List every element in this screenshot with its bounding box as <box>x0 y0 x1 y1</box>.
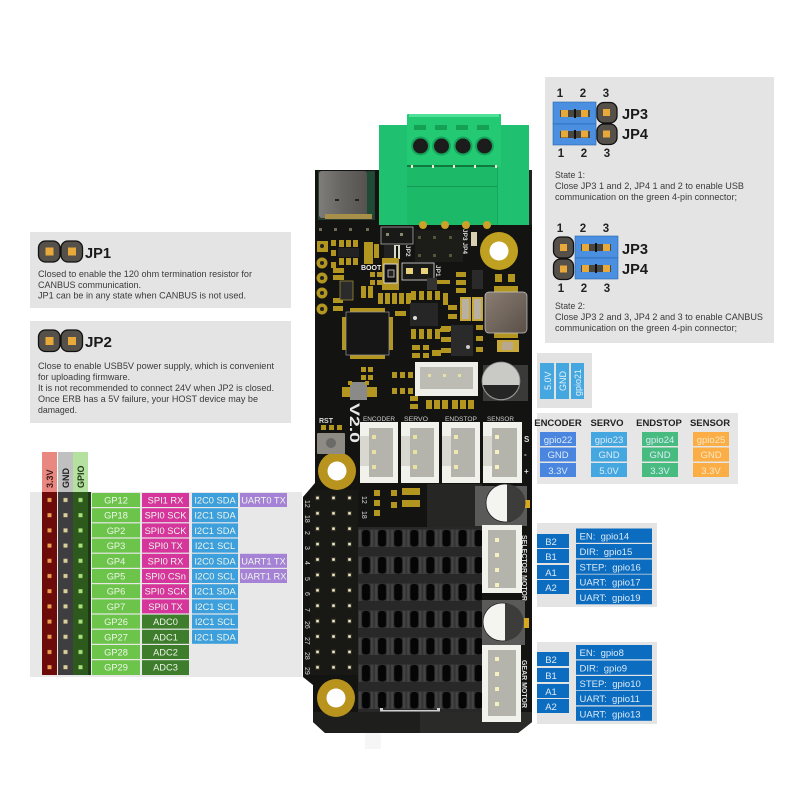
row: GP26: GP26 <box>104 617 128 627</box>
column: ENDSTOP: 3.3V <box>650 466 670 477</box>
panel: JP1 description <box>30 232 291 308</box>
board outline <box>303 170 532 733</box>
column: SENSOR: 3.3V <box>701 466 721 477</box>
connector: SERVO: SERVO <box>404 416 428 423</box>
row: GP27: I2C1 SDA <box>194 632 236 642</box>
text: JP2 description: It is not recommended to connect 24V when JP2 is closed. <box>38 383 274 393</box>
pin header labels: 29 <box>303 667 310 675</box>
header: 3.3V column <box>42 452 57 492</box>
labels: state 2 JP3 JP4: JP4 <box>622 261 649 278</box>
pin header labels <box>303 496 367 675</box>
diagram: state 2 jumpers: 2 <box>581 283 587 295</box>
driver signal labels <box>576 528 652 604</box>
row: GP27: ADC1 <box>153 632 178 642</box>
row: GP6: GP6 <box>107 587 125 597</box>
connector: SENSOR: SENSOR <box>487 416 514 423</box>
labels: state 2 JP3 JP4: JP3 <box>622 241 648 258</box>
column: SERVO <box>590 418 627 477</box>
inductor <box>485 292 527 333</box>
polarity labels: + <box>524 467 529 476</box>
row: GP18: GP18 <box>104 511 128 521</box>
header: GPIO column: GPIO <box>76 465 86 488</box>
column: SENSOR: GND <box>700 450 722 461</box>
panel: connector pinouts <box>534 413 738 484</box>
diagram: state 1 jumpers <box>553 88 617 160</box>
text: state 1: Close JP3 1 and 2, JP4 1 and 2 to enable USB <box>555 181 744 191</box>
labels: state 2 JP3 JP4 <box>622 241 649 278</box>
row: GP26: ADC0 <box>153 617 178 627</box>
column: SENSOR: SENSOR <box>690 418 730 429</box>
pin header labels: 27 <box>303 637 310 645</box>
polarity labels: S <box>524 435 530 444</box>
row: GP12: SPI1 RX <box>148 496 183 506</box>
driver signal labels: UART: gpio11 <box>580 694 640 705</box>
text: state 1: State 1: <box>555 170 585 180</box>
pin header labels: 12 <box>303 500 310 508</box>
capacitor 2 <box>475 484 530 526</box>
polarity labels <box>524 435 530 476</box>
text: JP1 description: CANBUS communication. <box>38 280 141 290</box>
row: GP4: I2C0 SDA <box>194 556 236 566</box>
column: SERVO: SERVO <box>590 418 624 429</box>
row: GP7 <box>92 599 238 613</box>
row: GP7: GP7 <box>107 602 125 612</box>
connector: SERVO <box>401 416 439 483</box>
motor coil labels: B2 <box>545 655 557 666</box>
motor coil labels: A2 <box>545 583 557 594</box>
labels: JP3 JP4 silkscreen: JP3 JP4 <box>461 229 468 254</box>
motor coil labels: B1 <box>545 671 557 682</box>
row: GP5 <box>92 569 287 583</box>
text: JP2 description: damaged. <box>38 405 77 415</box>
diagram: state 1 jumpers: 2 <box>581 148 587 160</box>
pin header labels: 3 <box>303 546 310 550</box>
row: GP6: SPI0 SCK <box>145 587 187 597</box>
column: ENCODER: GND <box>547 450 569 461</box>
pin strips <box>42 492 91 675</box>
castellated edge pads <box>316 241 328 314</box>
pin header labels: 12 <box>360 496 367 504</box>
row: GP12: GP12 <box>104 496 128 506</box>
motor coil labels: A2 <box>545 702 557 713</box>
row: GP29: GP29 <box>104 663 128 673</box>
reset button: RST <box>319 418 334 425</box>
row: GP12: I2C0 SDA <box>194 496 236 506</box>
label: BOOT: BOOT <box>361 265 382 272</box>
connector: ENCODER: ENCODER <box>363 416 395 423</box>
row: GP2 <box>92 523 238 537</box>
driver signal labels: UART: gpio19 <box>580 593 641 604</box>
row: GP3: I2C1 SCL <box>195 541 235 551</box>
row: GP3: SPI0 TX <box>148 541 183 551</box>
driver signal labels: EN: gpio14 <box>580 532 629 542</box>
panel: selector motor pins <box>537 523 657 607</box>
main processor <box>342 308 393 359</box>
row: GP12: UART0 TX <box>241 496 286 506</box>
text: state 2: Close JP3 2 and 3, JP4 2 and 3 to enable CANBUS <box>555 312 763 322</box>
label: JP2 silkscreen: JP2 <box>404 245 411 257</box>
header: 3.3V column: 3.3V <box>45 469 55 488</box>
column: ENCODER: gpio22 <box>544 435 572 446</box>
column: SERVO: GND <box>598 450 620 461</box>
row: GP2: I2C1 SDA <box>194 526 236 536</box>
driver signal labels: STEP: gpio16 <box>580 562 641 574</box>
driver signal labels: DIR: gpio15 <box>580 547 632 558</box>
pin header labels: 18 <box>360 511 367 519</box>
gold power blocks <box>460 286 519 352</box>
label: GEAR MOTOR: GEAR MOTOR <box>520 660 527 708</box>
column: SERVO: gpio23 <box>595 435 623 446</box>
driver signal labels: UART: gpio13 <box>580 710 641 720</box>
text: JP2 description: Close to enable USB5V power supply, which is convenient <box>38 361 275 371</box>
pad dots under USB <box>319 228 369 231</box>
JP2 header <box>381 227 413 259</box>
column: ENDSTOP: GND <box>649 450 671 461</box>
motor coil labels: B2 <box>545 537 557 548</box>
silkscreen: V2.0: V2.0 <box>347 403 363 443</box>
header: GND column: GND <box>61 468 71 488</box>
text: state 1: communication on the green 4-pin connector; <box>555 192 737 202</box>
green 4-pin connector <box>379 114 532 225</box>
label: JP1 silkscreen: JP1 <box>434 265 441 277</box>
row: GP5: SPI0 CSn <box>145 572 186 582</box>
row: GP26: I2C1 SCL <box>195 617 235 627</box>
connector: ENCODER <box>360 416 398 483</box>
panel: 5V GND gpio21: GND <box>558 370 568 391</box>
row: GP3 <box>92 539 238 553</box>
column: SERVO: 5.0V <box>599 466 619 477</box>
panel: GPIO pin table <box>30 452 302 677</box>
labels: state 1 JP3 JP4 <box>622 106 649 143</box>
row: GP5: GP5 <box>107 572 125 582</box>
pin header labels: 4 <box>303 561 310 565</box>
driver signal labels <box>576 645 652 721</box>
row: GP4 <box>92 554 287 568</box>
row: GP7: SPI0 TX <box>148 602 183 612</box>
panel: 5V GND gpio21 <box>537 353 592 408</box>
row: GP27 <box>92 630 238 644</box>
text: state 2: State 2: <box>555 301 585 311</box>
row: GP6: I2C1 SDA <box>194 587 236 597</box>
motor coil labels <box>537 652 569 713</box>
small chips <box>338 248 483 356</box>
row: GP3: GP3 <box>107 541 125 551</box>
top capacitor <box>482 362 528 401</box>
column: ENDSTOP <box>636 418 683 477</box>
diagram: state 1 jumpers: 2 <box>580 88 586 100</box>
heading: JP1: JP1 <box>85 245 111 262</box>
row: GP18 <box>92 508 238 522</box>
pin header labels: 18 <box>303 515 310 523</box>
column: ENDSTOP: ENDSTOP <box>636 418 683 429</box>
JP3 JP4 header <box>415 230 463 262</box>
text: JP2 description: Once ERB has a 5V failure, your HOST device may be <box>38 394 258 404</box>
row: GP29 <box>92 660 189 675</box>
reset button <box>317 418 345 454</box>
header: GND column <box>58 452 73 492</box>
gold pads row under connector <box>419 221 491 229</box>
column: SENSOR: gpio25 <box>697 435 725 446</box>
small surface components <box>331 240 515 516</box>
pin header labels: 26 <box>303 621 310 629</box>
text: JP2 description: for uploading firmware. <box>38 372 130 382</box>
diagram: state 2 jumpers: 1 <box>558 283 565 295</box>
labels: state 1 JP3 JP4: JP4 <box>622 126 649 143</box>
row: GP6 <box>92 584 238 598</box>
row: GP5: I2C0 SCL <box>195 572 235 582</box>
driver signal labels: STEP: gpio10 <box>580 679 641 690</box>
crystal <box>342 381 377 400</box>
diagram: state 2 jumpers: 3 <box>603 223 609 235</box>
connector: GEAR MOTOR <box>482 645 521 722</box>
motor coil labels <box>537 534 569 594</box>
row: GP12 <box>92 493 287 507</box>
diagram: state 1 jumpers: 3 <box>604 148 610 160</box>
row: GP7: I2C1 SCL <box>195 602 235 612</box>
text: JP1 description: JP1 can be in any state when CANBUS is not used. <box>38 290 246 300</box>
diagram: state 2 jumpers: 2 <box>580 223 586 235</box>
pin header labels: 2 <box>303 531 310 535</box>
connector: ENDSTOP: ENDSTOP <box>445 416 477 423</box>
motor coil labels: A1 <box>545 687 557 698</box>
polarity labels: - <box>524 450 527 459</box>
heading: JP2: JP2 <box>85 334 112 351</box>
diagram: state 2 jumpers: 1 <box>557 223 564 235</box>
panel: 5V GND gpio21: gpio21 <box>573 369 583 396</box>
text: JP1 description: Closed to enable the 120 ohm termination resistor for <box>38 269 252 279</box>
icon: JP2 jumper <box>38 330 82 352</box>
USB-C port <box>318 171 375 220</box>
boot button <box>382 258 399 290</box>
column: ENCODER: 3.3V <box>548 466 568 477</box>
JP1 header <box>402 263 434 280</box>
pin header labels: 28 <box>303 652 310 660</box>
row: GP4: GP4 <box>107 556 125 566</box>
icon: JP1 jumper <box>38 241 82 262</box>
mounting holes <box>317 232 518 717</box>
text: state 1 <box>555 170 744 202</box>
pin header labels: 7 <box>303 608 310 612</box>
connector: ENDSTOP <box>442 416 480 483</box>
driver signal labels: DIR: gpio9 <box>580 664 627 674</box>
row: GP2: GP2 <box>107 526 125 536</box>
row: GP4: UART1 TX <box>241 556 286 566</box>
column: SENSOR <box>690 418 730 477</box>
panel: JP2 description <box>30 321 291 423</box>
diagram: state 2 jumpers <box>554 223 618 295</box>
row: GP28 <box>92 645 189 659</box>
text: state 2: communication on the green 4-pin connector; <box>555 323 737 333</box>
diagram: state 1 jumpers: 3 <box>603 88 609 100</box>
column: ENCODER <box>534 418 582 477</box>
driver signal labels: EN: gpio8 <box>580 648 624 659</box>
column: ENCODER: ENCODER <box>534 418 582 429</box>
pin header labels: 6 <box>303 592 310 596</box>
capacitor 3 <box>482 600 529 645</box>
column: ENDSTOP: gpio24 <box>646 435 674 446</box>
pin header labels: 5 <box>303 577 310 581</box>
label: SELECTOR MOTOR: SELECTOR MOTOR <box>520 535 527 601</box>
row: GP2: SPI0 SCK <box>145 526 187 536</box>
circuit board <box>303 114 532 749</box>
panel: gear motor pins <box>537 642 657 724</box>
row: GP29: ADC3 <box>153 663 178 673</box>
panel: JP3 JP4 states <box>545 77 774 343</box>
row: GP28: GP28 <box>104 648 128 658</box>
text: state 2 <box>555 301 763 333</box>
row: GP5: UART1 RX <box>241 572 286 582</box>
row: GP4: SPI0 RX <box>148 556 183 566</box>
text: JP1 description <box>38 269 252 300</box>
driver signal labels: UART: gpio17 <box>580 578 641 588</box>
diagram: state 1 jumpers: 1 <box>557 88 564 100</box>
labels: state 1 JP3 JP4: JP3 <box>622 106 648 123</box>
diagram: state 1 jumpers: 1 <box>558 148 565 160</box>
row: GP28: ADC2 <box>153 648 178 658</box>
heatsink <box>358 527 482 712</box>
row: GP26 <box>92 615 238 629</box>
top 3-pin connector <box>415 362 478 396</box>
row: GP18: SPI0 SCK <box>145 511 187 521</box>
header: GPIO column <box>73 452 88 492</box>
row: GP27: GP27 <box>104 632 128 642</box>
motor coil labels: B1 <box>545 552 557 563</box>
motor coil labels: A1 <box>545 568 557 579</box>
diagram: state 2 jumpers: 3 <box>604 283 610 295</box>
panel: 5V GND gpio21: 5.0V <box>543 371 553 390</box>
text: JP2 description <box>38 361 275 415</box>
connector: SELECTOR MOTOR <box>482 525 522 593</box>
pin header <box>310 490 358 675</box>
connector: SENSOR <box>483 416 522 483</box>
row: GP18: I2C1 SDA <box>194 511 236 521</box>
